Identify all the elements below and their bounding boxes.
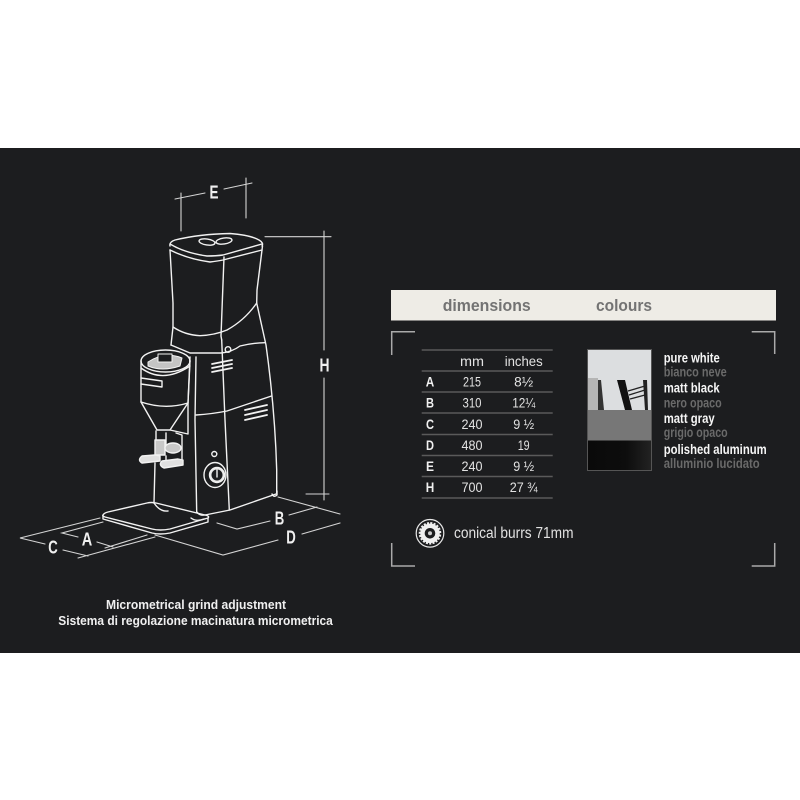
dimensions table: B [426, 396, 434, 411]
dimension C: C [48, 538, 58, 558]
dimensions table: E [426, 459, 434, 474]
dark background band [0, 148, 800, 653]
dimension A [62, 522, 147, 550]
grinder: adjustment knob [204, 452, 226, 488]
heading: colours: colours [596, 296, 652, 315]
colour names: grigio opaco [664, 425, 728, 440]
icon: conical burr [416, 520, 444, 547]
grinder: drip tray [103, 463, 209, 534]
dimensions table: C [426, 417, 434, 432]
dimensions table: 310 [462, 396, 482, 411]
panel corner brackets [392, 332, 775, 566]
caption: Micrometrical grind adjustment [106, 598, 287, 612]
burr label: conical burrs 71mm [454, 525, 574, 542]
dimension D [155, 523, 340, 555]
dimensions table: inches [505, 354, 543, 369]
dimensions table: A [426, 375, 434, 390]
grinder: portafilter fork [140, 431, 183, 468]
dimension C [20, 518, 155, 558]
dimensions table: 480 [462, 438, 482, 453]
colour names: alluminio lucidato [664, 456, 760, 471]
dimension H: H [320, 356, 330, 376]
dimensions table: 12¼ [512, 396, 536, 411]
grinder line drawing [103, 234, 277, 534]
colour names: matt gray [664, 411, 715, 426]
swatch: matt black [588, 440, 651, 470]
colour names: matt black [664, 381, 720, 396]
caption [58, 598, 334, 628]
dimensions table [422, 350, 553, 498]
colour names: bianco neve [664, 365, 727, 380]
dimensions table: D [426, 438, 434, 453]
dimension B [217, 497, 340, 529]
dimensions table: 9 ½ [513, 459, 534, 474]
grinder: lid [170, 234, 263, 262]
colour names: pure white [664, 350, 720, 365]
dimensions table: 8½ [514, 375, 533, 390]
caption: Sistema di regolazione macinatura micrometrica [58, 614, 334, 628]
dimensions table: 27 ¾ [510, 480, 538, 495]
grinder: vents [212, 360, 267, 420]
swatch: matt gray [588, 410, 651, 440]
header bar [391, 290, 776, 320]
dimensions table: 700 [462, 480, 482, 495]
colour names [664, 350, 767, 471]
colour names: nero opaco [664, 395, 722, 410]
dimensions table: 215 [463, 375, 481, 390]
dimensions table: 240 [462, 417, 482, 432]
dimension B: B [275, 508, 284, 528]
dimension E [175, 178, 252, 231]
dimensions table: mm [460, 354, 484, 369]
colour swatches [588, 350, 652, 470]
grinder: doser [141, 350, 190, 430]
grinder: body [170, 303, 277, 515]
dimension D: D [286, 528, 296, 548]
dimensions table: 19 [518, 438, 530, 453]
swatch: pure white [588, 350, 651, 410]
dimension A: A [82, 530, 92, 550]
grinder: hopper [170, 246, 262, 345]
dimension E: E [210, 182, 218, 202]
colour names: polished aluminum [664, 442, 767, 457]
dimensions table: H [426, 480, 434, 495]
dimensions table: 240 [462, 459, 482, 474]
heading: dimensions: dimensions [443, 296, 531, 315]
dimensions table: 9 ½ [513, 417, 534, 432]
dimension H [265, 231, 331, 500]
